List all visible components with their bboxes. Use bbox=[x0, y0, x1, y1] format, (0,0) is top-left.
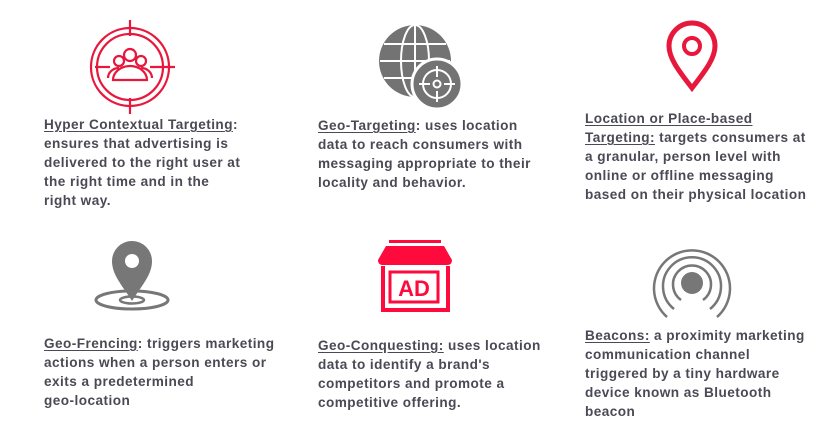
text: location targeting bbox=[585, 111, 806, 202]
icon: target with people bbox=[91, 20, 175, 114]
text: hyper contextual targeting: delivered to the right user at bbox=[44, 155, 240, 170]
icon: beacon bbox=[654, 250, 730, 317]
icon: AD store bbox=[378, 240, 452, 310]
text: geo-conquesting bbox=[318, 338, 541, 410]
text: location targeting: based on their physical location bbox=[585, 187, 806, 202]
text: beacons bbox=[585, 328, 805, 419]
text: geo-targeting: data to reach consumers with bbox=[318, 137, 522, 152]
text: geo-conquesting: competitors and promote a bbox=[318, 376, 504, 391]
text: geo-frencing: exits a predetermined bbox=[44, 374, 194, 389]
text: location targeting: online or offline messaging bbox=[585, 168, 774, 183]
text: beacons: Beacons: a proximity marketing bbox=[585, 328, 805, 343]
text: geo-conquesting: data to identify a brand's bbox=[318, 357, 490, 372]
icon: globe with target bbox=[379, 25, 462, 109]
text: geo-targeting: messaging appropriate to their bbox=[318, 156, 531, 171]
text: location targeting: Location or Place-based bbox=[585, 111, 752, 126]
text: location targeting: Targeting: targets consumers at bbox=[585, 130, 806, 145]
text: geo-conquesting: competitive offering. bbox=[318, 395, 461, 410]
text: hyper contextual targeting: right way. bbox=[44, 193, 111, 208]
text: geo-conquesting: Geo-Conquesting: uses location bbox=[318, 338, 541, 353]
icon: red location pin bbox=[669, 23, 715, 88]
text: hyper contextual targeting: the right time and in the bbox=[44, 174, 209, 189]
text: geo-targeting: Geo-Targeting: uses location bbox=[318, 118, 518, 133]
text: location targeting: a granular, person level with bbox=[585, 149, 781, 164]
text: beacons: device known as Bluetooth bbox=[585, 385, 772, 400]
text: beacons: beacon bbox=[585, 404, 635, 419]
text: geo-frencing bbox=[44, 336, 274, 408]
text: geo-frencing: geo-location bbox=[44, 393, 130, 408]
text: beacons: communication channel bbox=[585, 347, 750, 362]
text: geo-targeting: locality and behavior. bbox=[318, 175, 466, 190]
icon: AD store: AD bbox=[398, 276, 430, 301]
text: beacons: triggered by a tiny hardware bbox=[585, 366, 780, 381]
text: geo-targeting bbox=[318, 118, 531, 190]
text: hyper contextual targeting: ensures that advertising is bbox=[44, 136, 228, 151]
text: hyper contextual targeting bbox=[44, 117, 240, 208]
text: hyper contextual targeting: Hyper Contextual Targeting: bbox=[44, 117, 238, 132]
text: geo-frencing: actions when a person enters or bbox=[44, 355, 266, 370]
icon: gray pin with ellipse bbox=[96, 241, 168, 309]
text: geo-frencing: Geo-Frencing: triggers marketing bbox=[44, 336, 274, 351]
